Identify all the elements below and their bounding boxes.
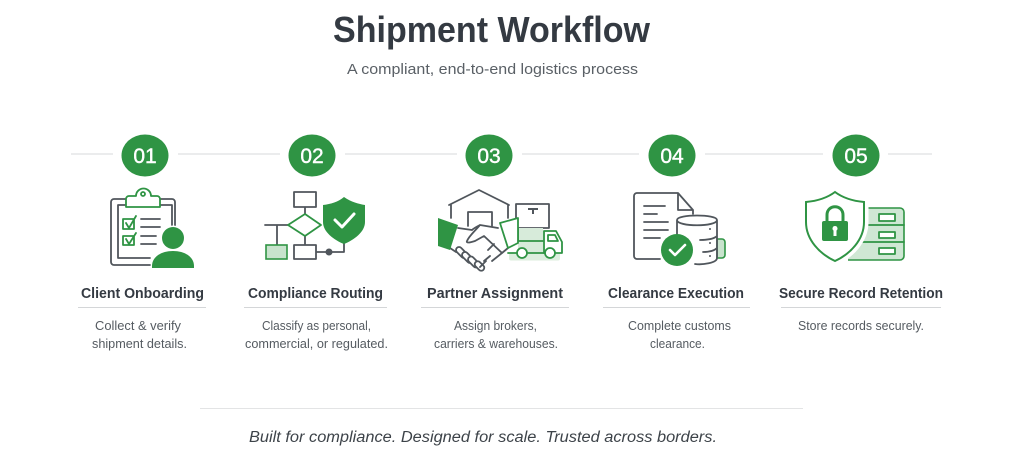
description: commercial, or regulated. [245, 337, 388, 351]
badge 01: 01 [133, 145, 157, 168]
description: Store records securely. [798, 319, 924, 333]
badge 02 [288, 134, 336, 176]
description [434, 319, 558, 351]
description [245, 319, 388, 351]
heading: Partner Assignment [427, 286, 563, 302]
panel: step 2 compliance routing [244, 134, 388, 351]
icon: document and database [634, 193, 725, 266]
heading: Client Onboarding [81, 286, 204, 302]
icon: shield lock and server stack [806, 192, 904, 262]
description: shipment details. [92, 337, 187, 351]
title: Shipment Workflow [333, 9, 651, 50]
panel: step 1 client onboarding [78, 134, 206, 351]
description: carriers & warehouses. [434, 337, 558, 351]
icon: flowchart and shield [265, 192, 365, 259]
icon: warehouse, handshake, truck [438, 190, 562, 272]
description: Collect & verify [95, 319, 182, 333]
subtitle: A compliant, end-to-end logistics process [347, 61, 638, 78]
heading: Compliance Routing [248, 286, 383, 302]
description [628, 319, 731, 351]
description [92, 319, 187, 351]
icon: clipboard and person [111, 189, 194, 268]
heading: Clearance Execution [608, 286, 744, 302]
badge 01 [122, 134, 168, 176]
description: Classify as personal, [262, 319, 371, 333]
description: clearance. [650, 337, 705, 351]
panel: step 5 secure record retention [779, 134, 943, 333]
badge 05 [832, 134, 880, 176]
badge 05: 05 [844, 145, 868, 168]
heading: Secure Record Retention [779, 286, 943, 302]
panel: step 4 clearance execution [603, 134, 750, 351]
footer tagline: Built for compliance. Designed for scale. Trusted across borders. [249, 429, 717, 446]
description: Complete customs [628, 319, 731, 333]
badge 03 [466, 134, 512, 176]
description: Assign brokers, [454, 319, 537, 333]
badge 04: 04 [660, 145, 684, 168]
panel: step 3 partner assignment [421, 134, 569, 351]
badge 02: 02 [300, 145, 324, 168]
badge 03: 03 [477, 145, 501, 168]
badge 04 [648, 134, 696, 176]
